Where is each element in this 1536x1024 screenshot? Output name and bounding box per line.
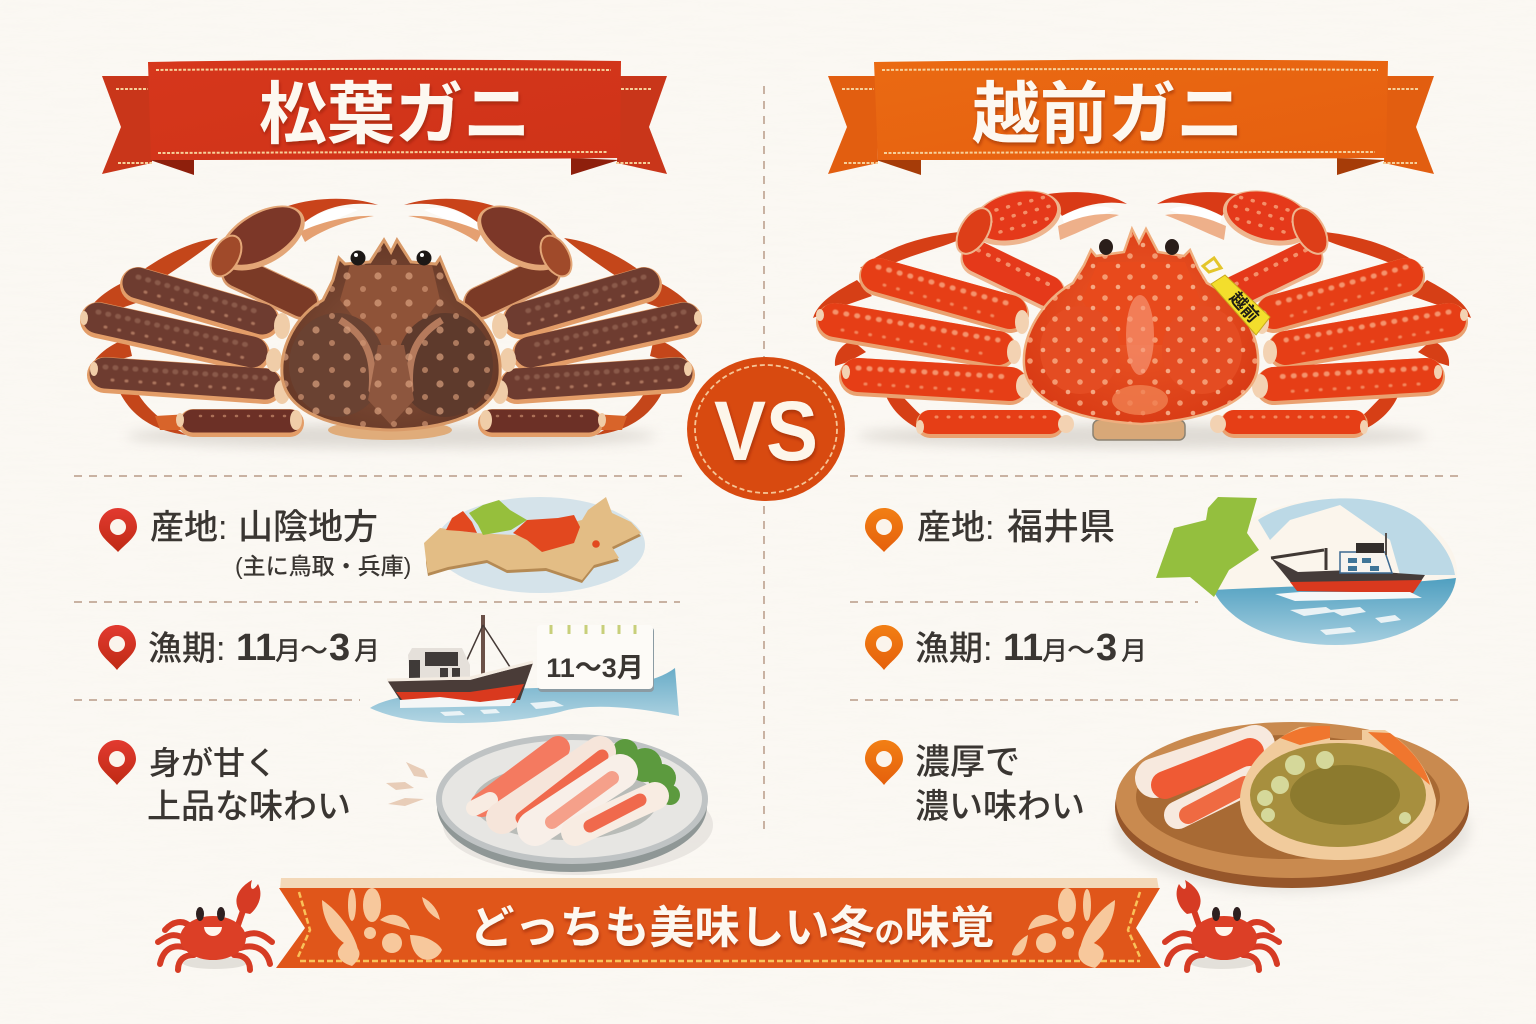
banner: footer message [276,878,1161,968]
calendar: 11〜3月 [546,653,644,683]
text: origin: 福井県 [1007,506,1115,547]
pin: season [865,625,903,670]
illustration: red Echizen crab [813,182,1471,448]
boat [387,615,533,708]
illustration: plate of crab meat [437,737,713,875]
text: origin: 産地: [917,509,994,547]
footer text: どっちも美味しい冬の味覚 [469,902,995,953]
text: flavor: 上品な味わい [147,788,351,826]
text: origin: 産地: [150,509,227,547]
text: season: 〜 [1067,635,1095,666]
icon: left mini crab [158,880,272,970]
map: Fukui [1156,497,1259,597]
text: season: 漁期: [148,630,225,668]
banner: Echizen crab title [828,60,1434,175]
text: flavor [147,745,351,826]
text: flavor: 濃厚で [915,743,1020,782]
text: season: 3 [1096,627,1117,669]
illustration: San'in map [424,497,645,593]
text: season: 月 [1042,636,1068,666]
tag: brand tag: 越前 [1226,288,1263,326]
text: season: 漁期: [915,630,992,668]
text: season: 11 [236,627,276,669]
pin: flavor [98,740,136,785]
icon: accent marks [386,762,428,806]
pin: flavor [865,740,903,785]
text: origin [150,508,411,579]
illustration: brown Matsuba crab [80,192,702,448]
pin: origin [865,508,903,552]
title: 松葉ガニ: 松葉ガニ [259,77,531,153]
badge: VS [687,357,845,501]
divider [850,476,1462,700]
text: season: 月 [354,636,380,666]
text: season: 〜 [300,635,328,666]
badge: VS: VS [714,384,818,478]
calendar [537,625,654,692]
banner: Matsuba crab title [102,60,667,175]
illustration: wooden board with crab meat and kani miso [1114,722,1470,892]
title: 越前ガニ: 越前ガニ [972,77,1244,153]
decoration: left leaves [322,888,442,966]
illustration: Fukui map and ship [1156,497,1457,645]
panel: Matsuba crab [74,60,713,875]
text: origin: (主に鳥取・兵庫) [235,553,411,579]
tag: brand tag [1203,258,1270,335]
text: season: 11 [1003,627,1043,669]
text: flavor [915,743,1085,826]
text: season: 月 [1121,636,1147,666]
text: season: 3 [329,627,350,669]
decoration: right leaves [1012,888,1115,968]
text: origin: 山陰地方 [238,508,378,547]
divider [74,476,684,700]
vertical divider [763,86,765,835]
text: season: 月 [275,636,301,666]
pin: season [98,625,136,670]
text: flavor: 身が甘く [149,745,277,781]
illustration: fishing boat and calendar [370,615,679,723]
text: flavor: 濃い味わい [915,788,1085,826]
pin: origin [99,508,137,552]
panel: Echizen crab [813,60,1471,892]
icon: right mini crab [1165,880,1279,970]
